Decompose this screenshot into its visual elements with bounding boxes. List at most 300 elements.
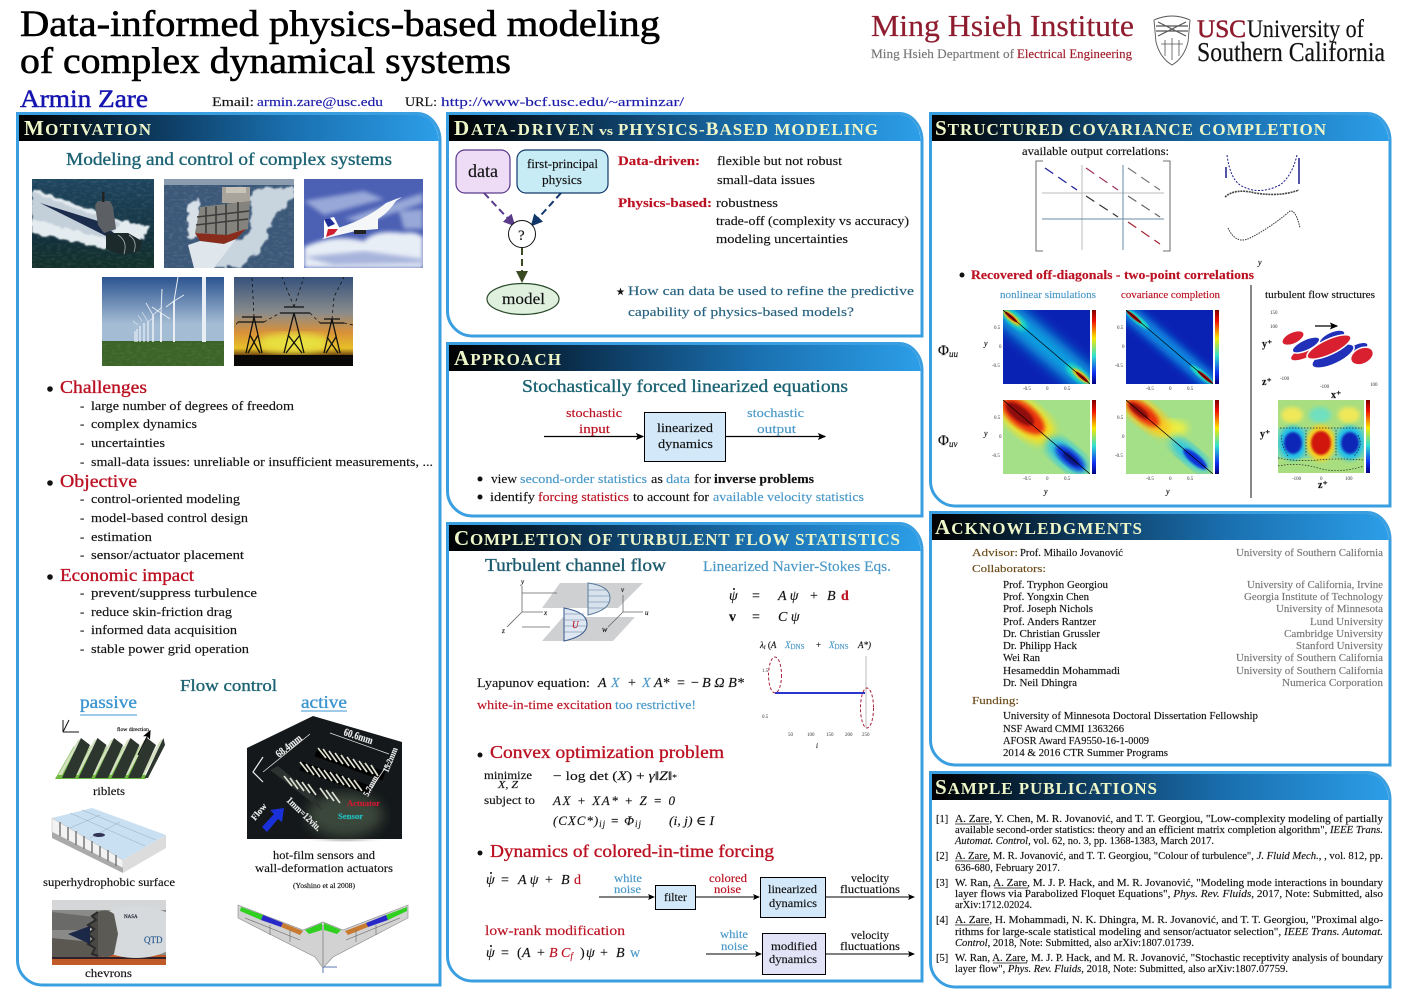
text: collaborators: Hesameddin Mohammadi <box>1003 665 1120 677</box>
list: challenges: large number of degrees of freedom <box>91 398 294 413</box>
equation: Lyapunov: A <box>597 676 607 691</box>
list: challenges: - <box>80 454 84 469</box>
bullet: identify forcing statistics: to account for <box>633 489 710 504</box>
diagram: input-output linearized dynamics: dynamics <box>658 436 713 451</box>
list: economic impact: informed data acquisition <box>91 622 238 637</box>
text: advisor: University of Southern California <box>1236 547 1383 559</box>
chart: eigenvalues of Lyapunov operator: X <box>785 640 790 650</box>
photo: power transmission lines <box>234 277 353 366</box>
photo: chevrons: NASA <box>124 915 138 920</box>
equation: filter dynamics: d <box>574 873 581 888</box>
heading: convex optimization problem: Convex optimization problem <box>490 742 724 762</box>
caption: hot-film sensors and actuators: hot-film sensors and <box>273 848 375 862</box>
equations: optimization problem: subject to <box>484 795 535 807</box>
list: challenges: - <box>80 398 84 413</box>
diagram: input-output linearized dynamics: stochastic <box>566 405 622 420</box>
heat map: completed Phi uu: 0.5 <box>1117 326 1124 331</box>
heat map: nonlinear Phi uu: 0.5 <box>994 326 1001 331</box>
publication 1: [1] <box>936 814 948 825</box>
chart: eigenvalues of Lyapunov operator: 150 <box>826 733 834 738</box>
heat map: completed Phi uu: 0.5 <box>1187 387 1194 392</box>
publication 2: 636-680, February 2017. <box>955 863 1060 874</box>
diagram: channel flow geometry: y <box>520 578 525 586</box>
diagram: modified dynamics: velocity <box>851 930 889 942</box>
heat map: completed Phi uv: 0.5 <box>1117 416 1124 421</box>
publication 1: Automat. Control, vol. 62, no. 3, pp. 1368-1383, March 2017. <box>954 836 1214 847</box>
chart: eigenvalues of Lyapunov operator: DNS <box>790 643 805 651</box>
heading: structured covariance completion: STRUCTURED COVARIANCE COMPLETION <box>935 116 1327 140</box>
text: collaborators: Wei Ran <box>1003 652 1040 664</box>
figure: riblets <box>55 720 165 779</box>
heading: data-driven vs physics-based: vs <box>599 123 613 138</box>
figure: 3D turbulent structures: x⁺ <box>1331 390 1341 401</box>
heat map: completed Phi uv: 0 <box>1122 435 1125 440</box>
label: Phi uu: uu <box>949 349 958 359</box>
text: key question: ★ <box>616 287 625 298</box>
bullet: view second-order statistics: second-order statistics <box>520 471 647 486</box>
heat map: completed Phi uv <box>1115 389 1219 496</box>
subheading: linearized Navier-Stokes equations: Linearized Navier-Stokes Eqs. <box>703 559 891 575</box>
label: passive: passive <box>80 692 137 712</box>
chart: eigenvalues of Lyapunov operator: i <box>764 645 766 651</box>
figure: 3D turbulent structures: y⁺ <box>1262 339 1272 350</box>
heading: approach: APPROACH <box>454 346 561 370</box>
diagram: filter and linearized dynamics: noise <box>714 884 741 896</box>
chart: eigenvalues of Lyapunov operator: + <box>816 640 821 650</box>
heat map: cross-plane flow structures: z⁺ <box>1318 480 1328 491</box>
publication 5: layer flow", Phys. Rev. Fluids, 2018, Note: Submitted, also arXiv:1807.07759. <box>955 964 1288 975</box>
caption: hot-film sensors and actuators <box>255 848 393 890</box>
text: physics-based properties: trade-off (complexity vs accuracy) <box>716 213 909 228</box>
list: economic impact: - <box>80 585 84 600</box>
heat map: nonlinear Phi uu <box>983 304 1096 392</box>
equation: filter dynamics: + <box>545 873 553 888</box>
diagram: modified dynamics: modified <box>771 941 817 953</box>
list: challenges: - <box>80 435 84 450</box>
equations: linearized dynamics: C ψ <box>778 610 800 625</box>
logo: University of Southern California: University of <box>1247 16 1365 43</box>
figure: wing with control surfaces <box>238 905 408 973</box>
text: collaborators: University of Southern California <box>1236 665 1383 677</box>
node: question mark <box>508 220 536 248</box>
text: key question: How can data be used to refine the predictive <box>628 283 914 298</box>
publication 5: W. Ran, A. Zare, M. J. P. Hack, and M. R. Jovanović, "Stochastic receptivity analysis of boundary <box>955 953 1384 964</box>
logo: University of Southern California <box>1197 16 1385 67</box>
diagram: modified dynamics: white <box>720 929 748 941</box>
list: challenges: complex dynamics <box>91 416 197 431</box>
bullet: identify forcing statistics: identify <box>490 489 536 504</box>
chart: velocity correlation profiles <box>1225 155 1300 267</box>
figure: 3D turbulent structures: 150 <box>1270 311 1278 316</box>
equation: filter dynamics <box>486 872 581 888</box>
label: active: active <box>301 692 347 712</box>
chart: velocity correlation profiles: y <box>1257 258 1262 267</box>
equation: Lyapunov: = <box>677 676 685 691</box>
caption: superhydrophobic surface: superhydrophobic surface <box>43 875 175 889</box>
publication 4: Control, 2018, Note: Submitted, also arXiv:1807.01739. <box>955 938 1194 949</box>
publication 4: [4] <box>936 915 948 926</box>
logo: Ming Hsieh Institute: Ming Hsieh Institute <box>871 8 1134 43</box>
heading: completion of turbulent flow statistics: COMPLETION OF TURBULENT FLOW STATISTICS <box>454 526 900 550</box>
diagram: channel flow geometry <box>501 578 649 641</box>
equation: Lyapunov: A* <box>653 676 670 691</box>
heat map: nonlinear Phi uv: y <box>1043 487 1048 496</box>
text: physics-based properties: Physics-based: <box>618 195 712 210</box>
text: collaborators: University of Southern California <box>1236 652 1383 664</box>
text: funding: Funding: <box>972 695 1019 707</box>
heat map: nonlinear Phi uu: -0.5 <box>1023 387 1031 392</box>
chart: eigenvalues of Lyapunov operator: 0.5 <box>762 715 769 720</box>
panel: data-driven vs physics-based modeling <box>448 114 922 336</box>
separator line <box>1250 285 1252 498</box>
heat map: completed Phi uv: 0.5 <box>1187 477 1194 482</box>
list: objective <box>47 471 249 562</box>
heat map: nonlinear Phi uv: -0.5 <box>1023 477 1031 482</box>
diagram: filter and linearized dynamics: noise <box>614 884 641 896</box>
equation: Lyapunov: X <box>610 676 620 691</box>
list: economic impact: - <box>80 622 84 637</box>
publication 3: layer flows via Parabolized Floquet Equations", Phys. Rev. Fluids , 2017, Note: Submitted, also <box>955 889 1383 900</box>
list: challenges <box>47 377 433 469</box>
logo: Ming Hsieh Institute <box>871 8 1134 61</box>
diagram: filter and linearized dynamics: colored <box>709 873 747 885</box>
text: data-driven properties: small-data issues <box>717 172 815 187</box>
subheading: flow control: Flow control <box>180 676 277 695</box>
equations: linearized dynamics: + <box>810 589 818 604</box>
text: funding: NSF Award CMMI 1363266 <box>1003 723 1124 735</box>
bullet: view second-order statistics: data <box>666 471 690 486</box>
equation: filter dynamics: B <box>561 873 570 888</box>
heading: acknowledgments: ACKNOWLEDGMENTS <box>935 515 1142 539</box>
equations: linearized dynamics <box>729 588 849 625</box>
heading: data-driven vs physics-based: DATA-DRIVEN <box>454 116 595 140</box>
bullet: identify forcing statistics: available velocity statistics <box>713 489 864 504</box>
text: data-driven properties: Data-driven: <box>618 153 700 168</box>
heat map: cross-plane flow structures: -100 <box>1292 477 1302 482</box>
chart: eigenvalues of Lyapunov operator: λ <box>760 640 764 650</box>
chart: eigenvalues of Lyapunov operator: 100 <box>807 733 815 738</box>
panel: completion of turbulent flow statistics <box>447 524 922 981</box>
equation: Lyapunov <box>477 675 744 691</box>
diagram: filter and linearized dynamics: velocity <box>851 873 889 885</box>
text: funding: 2014 & 2016 CTR Summer Programs <box>1003 747 1168 759</box>
equation: Lyapunov: Lyapunov equation: <box>477 675 590 690</box>
text: collaborators: Prof. Anders Rantzer <box>1003 616 1096 628</box>
logo: Ming Hsieh Institute: Electrical Engineering <box>1017 46 1132 61</box>
labels: heat map columns: nonlinear simulations <box>1000 290 1096 301</box>
text: advisor <box>972 547 1383 559</box>
bullet: view second-order statistics: for <box>694 471 712 486</box>
photo: submarine <box>32 179 154 268</box>
text: low-rank modification: low-rank modification <box>485 923 625 938</box>
caption: riblets: riblets <box>93 784 125 798</box>
figure: 3D turbulent structures: -100 <box>1280 377 1290 382</box>
text: collaborators: Lund University <box>1310 616 1383 628</box>
publication 4 <box>936 915 1384 949</box>
equation: modified dynamics: ψ <box>486 946 495 961</box>
text: key question: capability of physics-based models? <box>628 304 854 319</box>
list: objective: - <box>80 547 84 562</box>
box: data <box>456 150 510 193</box>
photo: hot-film sensors and actuators: 5.7mm <box>361 773 380 798</box>
heat map: nonlinear Phi uv: 0.5 <box>1064 477 1071 482</box>
list: economic impact: reduce skin-friction drag <box>91 604 233 619</box>
heat map: nonlinear Phi uu: 0 <box>999 345 1002 350</box>
equation: modified dynamics: ) <box>580 946 585 961</box>
text: funding: University of Minnesota Doctoral Dissertation Fellowship <box>1003 710 1258 722</box>
box: first-principal physics: first-principal <box>527 156 598 171</box>
equations: optimization problem: ij <box>599 819 606 829</box>
diagram: filter and linearized dynamics: white <box>614 873 642 885</box>
diagram: channel flow geometry: U <box>572 620 579 630</box>
author and contact line: URL: <box>405 94 437 109</box>
text: physics-based properties: modeling uncertainties <box>716 231 848 246</box>
label: Phi uv: uv <box>949 439 957 449</box>
equations: linearized dynamics: B <box>827 589 836 604</box>
heat map: completed Phi uu: 0 <box>1169 387 1172 392</box>
diagram: channel flow geometry: v <box>621 586 625 594</box>
arrow: question to model <box>521 248 523 281</box>
publication 1 <box>936 814 1384 847</box>
box: data: data <box>468 161 498 181</box>
publication 2: A. Zare, M. R. Jovanović, and T. T. Georgiou, "Colour of turbulence", J. Fluid Mech., , vol. 812, pp. <box>955 851 1383 862</box>
equations: linearized dynamics: ψ <box>729 589 738 604</box>
text: physics-based properties: robustness <box>716 195 778 210</box>
heat map: nonlinear Phi uu: 0 <box>1046 387 1049 392</box>
photo: chevrons <box>52 900 166 965</box>
diagram: channel flow geometry: x <box>543 609 548 617</box>
caption: hot-film sensors and actuators: (Yoshino et al 2008) <box>293 881 355 890</box>
diagram: channel flow geometry: z <box>501 627 505 635</box>
equation: modified dynamics: = <box>501 946 509 961</box>
chart: eigenvalues of Lyapunov operator: X <box>829 640 834 650</box>
diagram: modified dynamics: fluctuations <box>840 941 901 953</box>
heat map: nonlinear Phi uu: 0.5 <box>1064 387 1071 392</box>
photo: hot-film sensors and actuators: 1mm=12viu. <box>284 795 324 834</box>
chart: eigenvalues of Lyapunov operator: 200 <box>845 733 853 738</box>
equation: modified dynamics: ( <box>517 946 522 961</box>
node: model: model <box>502 291 546 308</box>
publication 2: [2] <box>936 851 948 862</box>
publication 5 <box>936 953 1384 975</box>
equations: linearized dynamics: v <box>729 610 736 625</box>
photo: hot-film sensors and actuators: Actuator <box>347 799 380 808</box>
diagram: channel flow geometry: u <box>645 609 649 617</box>
equation: modified dynamics: ψ <box>586 946 595 961</box>
heat map: completed Phi uu: 0 <box>1122 345 1125 350</box>
panel: approach <box>448 344 922 516</box>
bullet: identify forcing statistics: forcing statistics <box>538 489 629 504</box>
photo: Concorde aircraft <box>304 179 423 268</box>
panel: acknowledgments <box>930 512 1390 765</box>
list: objective: - <box>80 491 84 506</box>
chart: eigenvalues of Lyapunov operator: DNS <box>834 643 849 651</box>
text: collaborators: Cambridge University <box>1284 628 1383 640</box>
text: collaborators: Georgia Institute of Technology <box>1244 591 1383 603</box>
photo: hot-film sensors and actuators <box>247 716 402 839</box>
publication 1: available second-order statistics: theory and an efficient matrix completion algorithm", IEEE Trans. <box>955 825 1383 836</box>
publication 3: [3] <box>936 878 948 889</box>
labels: heat map columns: turbulent flow structures <box>1265 290 1375 301</box>
diagram: channel flow geometry: w <box>602 625 608 634</box>
heading: motivation: MOTIVATION <box>24 116 152 140</box>
list: challenges: small-data issues: unreliable or insufficient measurements, ... <box>91 454 433 469</box>
diagram: filter and linearized dynamics <box>599 873 914 918</box>
publication 3 <box>936 878 1384 911</box>
equations: linearized dynamics: A ψ <box>777 589 799 604</box>
bullet: view second-order statistics: as <box>651 471 663 486</box>
title: of complex dynamical systems <box>20 41 511 82</box>
chart: eigenvalues of Lyapunov operator: A <box>771 640 776 650</box>
logo: University of Southern California: USC <box>1197 16 1246 43</box>
photo: chevrons: QTD <box>144 935 163 945</box>
diagram: input-output linearized dynamics: linearized <box>657 420 714 435</box>
chart: eigenvalues of Lyapunov operator: 1.5 <box>762 669 769 674</box>
heat map: nonlinear Phi uv: -0.5 <box>992 454 1000 459</box>
text: data-driven properties: flexible but not robust <box>717 153 842 168</box>
text: collaborators: Dr. Christian Grussler <box>1003 628 1100 640</box>
equation: modified dynamics: w <box>630 946 641 961</box>
box: first-principal physics <box>517 150 608 193</box>
author and contact line: Armin Zare <box>20 86 148 113</box>
equation: Lyapunov: + <box>628 676 636 691</box>
note: white-in-time restriction: too restrictive! <box>615 697 696 712</box>
list: economic impact <box>47 565 257 656</box>
label: Phi uu: Φ <box>938 343 949 359</box>
labels: heat map columns: covariance completion <box>1121 290 1221 301</box>
list: economic impact: prevent/suppress turbulence <box>91 585 257 600</box>
text: collaborators: Stanford University <box>1296 640 1383 652</box>
author and contact line: armin.zare@usc.edu <box>257 94 384 109</box>
heat map: completed Phi uv: y <box>1165 487 1170 496</box>
subheading: stochastically forced equations: Stochastically forced linearized equations <box>522 376 848 396</box>
text: collaborators: Dr. Philipp Hack <box>1003 640 1077 652</box>
list: economic impact: - <box>80 641 84 656</box>
chart: eigenvalues of Lyapunov operator: 250 <box>862 733 870 738</box>
heading: dynamics of colored-in-time forcing: Dynamics of colored-in-time forcing <box>490 841 774 861</box>
arrow: physics to question <box>532 193 561 225</box>
text: funding: AFOSR Award FA9550-16-1-0009 <box>1003 735 1149 747</box>
list: objective: sensor/actuator placement <box>91 547 244 562</box>
list: economic impact: - <box>80 604 84 619</box>
publication 3: arXiv:1712.02024. <box>955 900 1032 911</box>
bullet: view second-order statistics: view <box>491 471 518 486</box>
list: objective: - <box>80 529 84 544</box>
heat map: cross-plane flow structures: y⁺ <box>1260 429 1270 440</box>
author and contact line: Email: <box>212 94 254 109</box>
text: data-driven properties <box>618 153 842 187</box>
list: objective: estimation <box>91 529 153 544</box>
text: collaborators: University of California, Irvine <box>1247 579 1383 591</box>
equations: linearized dynamics: = <box>752 589 760 604</box>
equation: filter dynamics: = <box>501 873 509 888</box>
equations: optimization problem: = Φ <box>606 813 634 828</box>
heat map: nonlinear Phi uv <box>983 386 1096 496</box>
equation: modified dynamics <box>486 945 641 961</box>
diagram: filter and linearized dynamics: dynamics <box>769 898 818 910</box>
list: objective: model-based control design <box>91 510 249 525</box>
equation: modified dynamics: f <box>570 951 574 961</box>
chart: eigenvalues of Lyapunov operator: i <box>816 742 818 750</box>
panel: sample publications <box>930 772 1390 987</box>
list: challenges: Challenges <box>60 377 147 397</box>
note: white-in-time restriction <box>477 697 696 712</box>
equation: filter dynamics: ψ <box>486 873 495 888</box>
photo: hot-film sensors and actuators: 15.2mm <box>381 746 400 774</box>
diagram: filter and linearized dynamics: fluctuations <box>840 884 901 896</box>
text: physics-based properties <box>618 195 909 246</box>
panel: motivation <box>18 114 440 985</box>
author and contact line: http://www-bcf.usc.edu/~arminzar/ <box>441 94 685 109</box>
logo: USC crest <box>1154 16 1190 65</box>
text: collaborators: Prof. Tryphon Georgiou <box>1003 579 1108 591</box>
heading: recovered off-diagonals: Recovered off-diagonals - two-point correlations <box>971 267 1254 282</box>
list: objective: Objective <box>60 471 137 491</box>
equations: linearized dynamics: = <box>752 610 760 625</box>
label: Phi uv: Φ <box>938 433 949 449</box>
list: objective: control-oriented modeling <box>91 491 241 506</box>
heat map: nonlinear Phi uu: y <box>983 339 988 348</box>
equations: optimization problem: (CXC*) <box>553 813 598 828</box>
diagram: modified dynamics <box>706 929 914 974</box>
text: advisor: Prof. Mihailo Jovanović <box>1020 547 1123 559</box>
diagram: input-output linearized dynamics: input <box>579 421 610 436</box>
list: economic impact: Economic impact <box>60 565 194 585</box>
heat map: completed Phi uv: -0.5 <box>1146 477 1154 482</box>
text: collaborators <box>972 563 1384 689</box>
equation: modified dynamics: B <box>616 946 625 961</box>
heading: data-driven vs physics-based <box>454 116 878 140</box>
arrow: data to question <box>484 193 514 225</box>
diagram: filter and linearized dynamics: filter <box>664 892 687 904</box>
equations: optimization problem: ij <box>635 819 641 829</box>
publication 4: rithms for large-scale statistical modeling and sensor/actuator selection", IEEE Trans. Automat. <box>955 927 1383 938</box>
figure: 3D turbulent structures: z⁺ <box>1262 377 1272 388</box>
equation: modified dynamics: + <box>600 946 608 961</box>
diagram: modified dynamics: dynamics <box>769 954 818 966</box>
diagram: input-output linearized dynamics <box>544 405 825 462</box>
text: collaborators: Prof. Joseph Nichols <box>1003 603 1093 615</box>
equations: optimization problem: X, Z <box>497 780 519 791</box>
equation: modified dynamics: B C <box>549 946 570 961</box>
heading: sample publications: SAMPLE PUBLICATIONS <box>935 775 1157 799</box>
diagram: modified dynamics: noise <box>721 941 748 953</box>
equations: optimization problem: − log det ( X) + γ‖Z‖* <box>553 768 677 783</box>
chart: eigenvalues of Lyapunov operator <box>759 640 874 750</box>
panel: structured covariance completion <box>930 114 1390 506</box>
equations: optimization problem <box>484 768 715 829</box>
equations: optimization problem: (i, j) ∈ I <box>669 813 715 828</box>
diagram: input-output linearized dynamics: stochastic <box>747 405 804 420</box>
equation: Lyapunov: − <box>691 676 699 691</box>
text: collaborators: Prof. Yongxin Chen <box>1003 591 1089 603</box>
publication 1: A. Zare, Y. Chen, M. R. Jovanović, and T. T. Georgiou, "Low-complexity modeling of partially <box>955 814 1384 825</box>
text: key question <box>616 283 914 319</box>
text: collaborators: Dr. Neil Dhingra <box>1003 677 1077 689</box>
photo: hot-film sensors and actuators: Sensor <box>338 812 363 821</box>
publication 5: [5] <box>936 953 948 964</box>
figure: 3D turbulent structures: 100 <box>1370 383 1378 388</box>
bullet: view second-order statistics: inverse problems <box>714 471 814 486</box>
author and contact line <box>20 86 685 113</box>
figure: 3D turbulent structures: -100 <box>1320 385 1330 390</box>
figure: 3D turbulent structures: 100 <box>1270 325 1278 330</box>
text: collaborators: Collaborators: <box>972 563 1046 575</box>
title: Data-informed physics-based modeling <box>20 4 660 45</box>
heat map: completed Phi uu: -0.5 <box>1115 364 1123 369</box>
photo: container ship <box>164 179 294 268</box>
figure: superhydrophobic surface <box>52 808 166 873</box>
